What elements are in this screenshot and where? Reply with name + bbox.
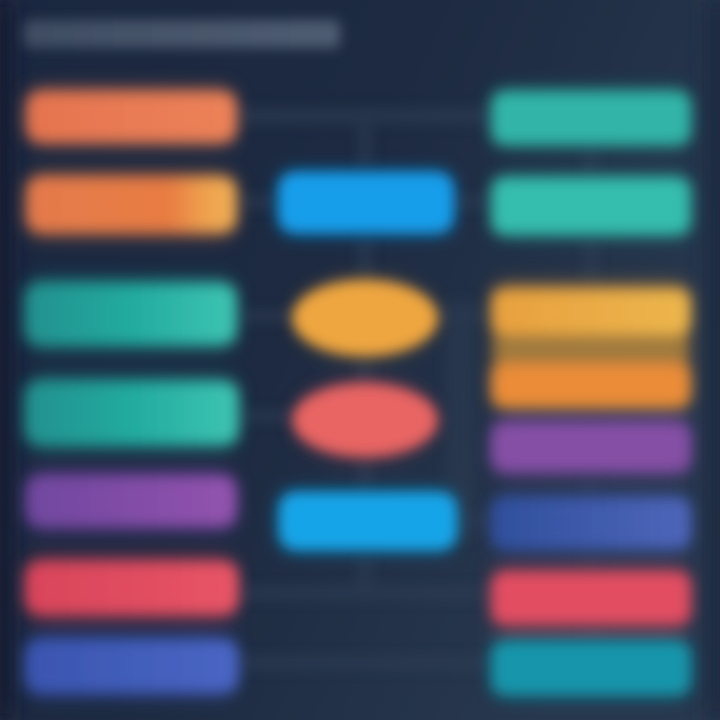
bar: indigo [492,498,690,548]
right column glows [494,90,688,696]
bar: orange 1 [27,92,236,142]
node: red diamond [293,384,437,456]
bar: orange [492,363,690,407]
title [24,20,340,48]
bar: teal 1 [26,284,236,344]
bar: red [26,562,238,614]
node: blue 2 [280,493,456,549]
bar: indigo [26,640,238,692]
center column nodes [279,173,456,549]
node: blue 1 [279,173,453,232]
center glows [280,172,454,550]
bar: yellow [492,289,690,335]
bar: amber band between yellow and orange [497,336,685,362]
node: yellow diamond [293,281,437,355]
bar: purple [27,476,236,526]
connectors [240,108,598,670]
bar: teal 1 [492,92,690,144]
bar: red [492,572,690,624]
bar: orange 2 [27,177,236,232]
bar: purple [492,423,690,471]
bar: teal 2 [492,178,690,234]
bar: teal 2 [26,382,238,444]
left column glows [28,88,236,696]
right column bars [492,92,690,694]
left column bars [26,92,238,692]
bar: cyan teal [492,642,690,694]
